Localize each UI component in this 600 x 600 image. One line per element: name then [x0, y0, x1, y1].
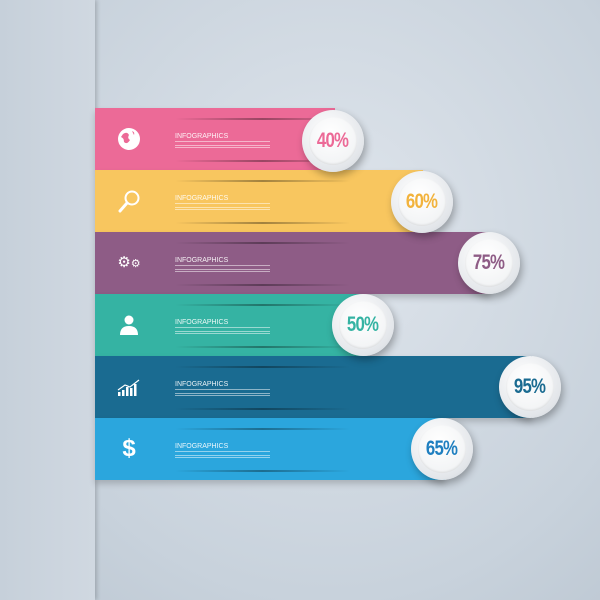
- circle 75%: [458, 232, 520, 294]
- circle 50%: [332, 294, 394, 356]
- left side panel: [0, 0, 95, 600]
- circle 95%: [499, 356, 561, 418]
- circle 65%: 65%: [426, 437, 458, 460]
- icon: magnifier: [118, 190, 140, 213]
- circle 75%: 75%: [473, 251, 505, 274]
- circle 60%: [391, 171, 453, 233]
- circle 40%: 40%: [317, 129, 349, 152]
- icon: person: [120, 316, 138, 335]
- icon: globe: [118, 128, 140, 150]
- bar: purple 75%: INFOGRAPHICS: [175, 257, 228, 264]
- icon: growth chart: [118, 380, 140, 396]
- icon: dollar: $: [122, 435, 136, 462]
- bar: pink 40%: [95, 108, 335, 170]
- circle 50%: 50%: [347, 313, 379, 336]
- bar: dark blue 95%: INFOGRAPHICS: [175, 381, 228, 388]
- circle 65%: [411, 418, 473, 480]
- icon: gears: ⚙⚙: [117, 254, 141, 271]
- bar: yellow 60%: [95, 170, 423, 232]
- circle 60%: 60%: [406, 190, 438, 213]
- circle 40%: [302, 110, 364, 172]
- text block: [175, 133, 270, 148]
- bar: light blue 65%: INFOGRAPHICS: [175, 443, 228, 450]
- circle 95%: 95%: [514, 375, 546, 398]
- bar: light blue 65%: [95, 418, 445, 480]
- bar: pink 40%: INFOGRAPHICS: [175, 133, 228, 140]
- bar: dark blue 95%: [95, 356, 532, 418]
- bar: teal 50%: [95, 294, 363, 356]
- bar: teal 50%: INFOGRAPHICS: [175, 319, 228, 326]
- bar: yellow 60%: INFOGRAPHICS: [175, 195, 228, 202]
- bar: purple 75%: [95, 232, 490, 294]
